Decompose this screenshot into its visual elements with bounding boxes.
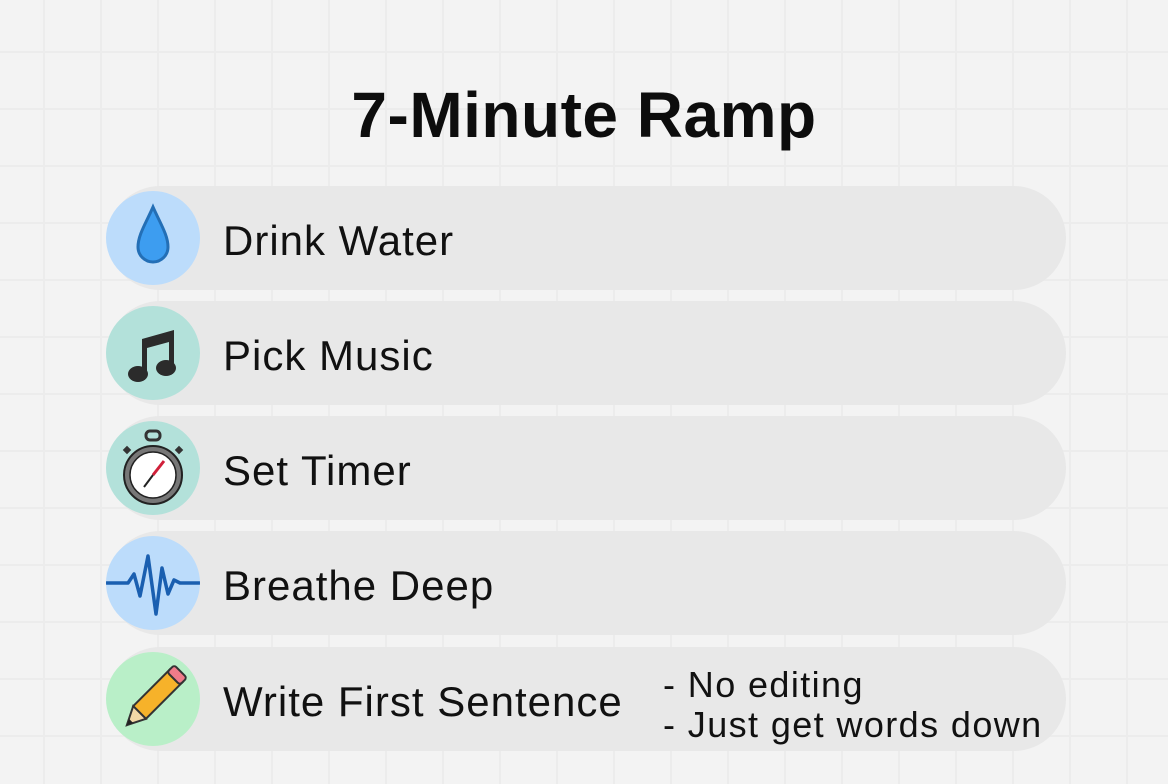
row: write first sentence xyxy=(108,647,1066,751)
icon: stopwatch xyxy=(106,421,200,515)
row: set timer xyxy=(108,416,1066,520)
row: pick music xyxy=(108,301,1066,405)
icon: music note xyxy=(106,306,200,400)
label: Drink Water xyxy=(223,217,454,264)
icon: water drop xyxy=(106,191,200,285)
row: breathe deep xyxy=(108,531,1066,635)
title: 7-Minute Ramp xyxy=(351,79,817,151)
note xyxy=(663,664,1043,745)
icon: pencil xyxy=(106,652,200,746)
label: Breathe Deep xyxy=(223,562,494,609)
label: Write First Sentence xyxy=(223,678,623,725)
label: Pick Music xyxy=(223,332,434,379)
note: - Just get words down xyxy=(663,704,1043,745)
row: drink water xyxy=(108,186,1066,290)
note: - No editing xyxy=(663,664,864,705)
icon: waveform xyxy=(106,536,200,630)
label: Set Timer xyxy=(223,447,412,494)
